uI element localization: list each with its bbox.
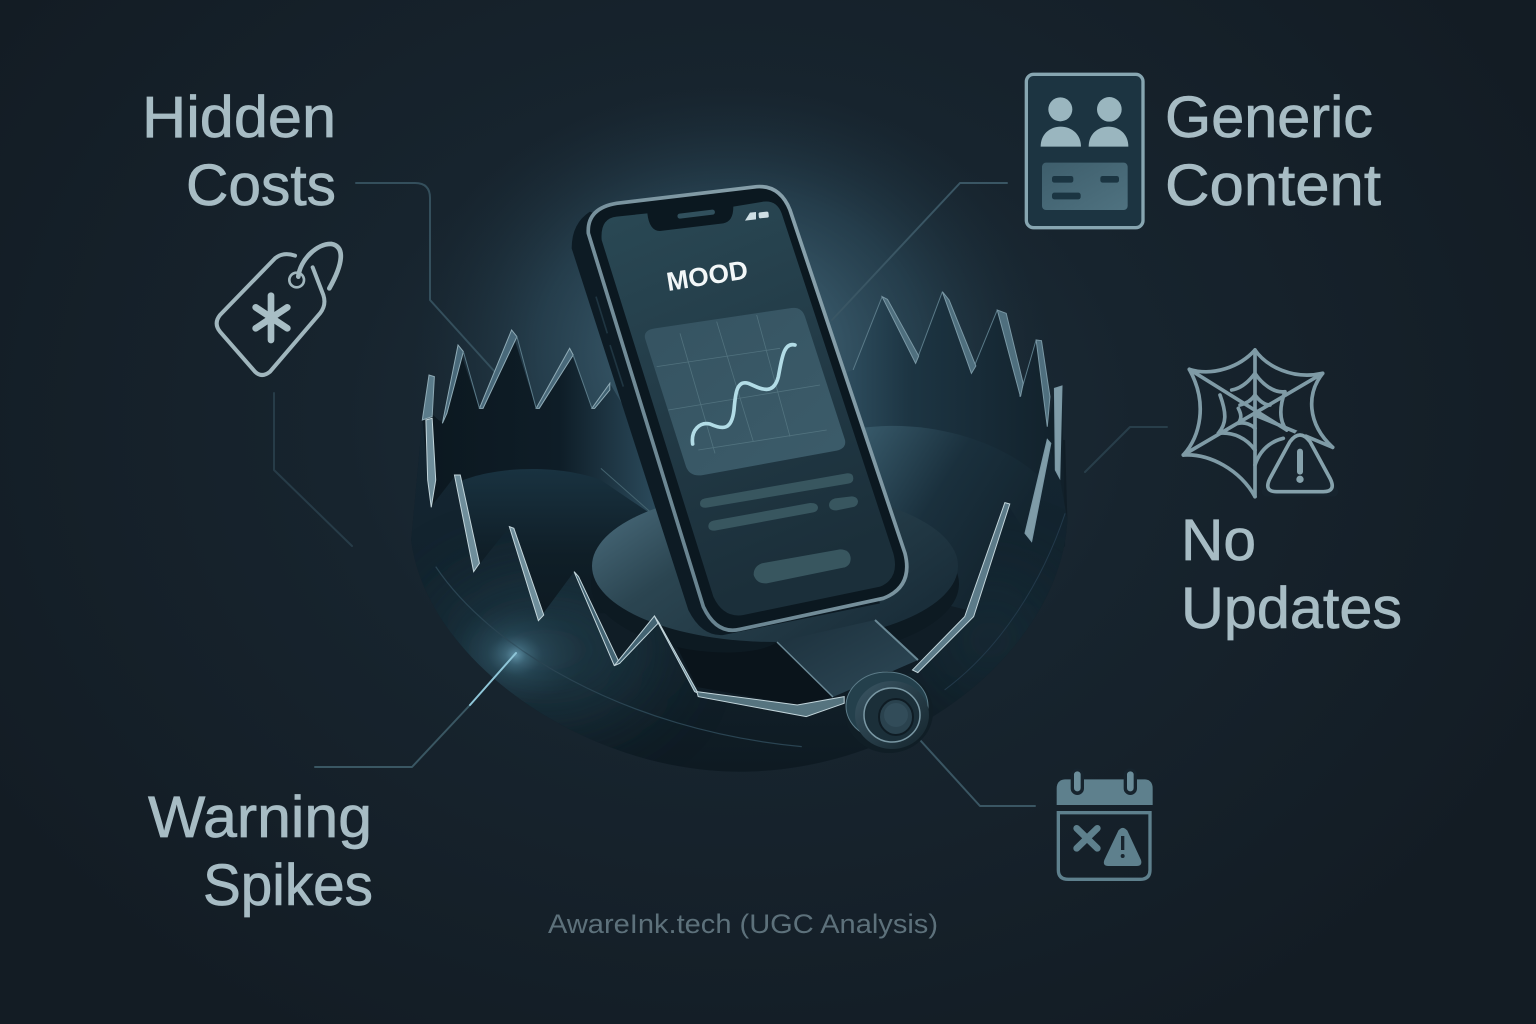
floor platform — [591, 490, 959, 660]
phone — [572, 187, 907, 635]
app title: MOOD — [664, 254, 750, 297]
label: Generic Content: Generic — [1165, 85, 1373, 150]
text bars — [700, 473, 858, 583]
chart grid — [657, 315, 827, 453]
phone speaker — [677, 209, 715, 219]
chart card — [645, 308, 845, 475]
central glow behind phone — [410, 80, 1050, 620]
label: Generic Content: Content — [1165, 153, 1381, 218]
label: No Updates: Updates — [1181, 576, 1402, 641]
phone bezel — [588, 187, 907, 630]
label: Warning Spikes: Warning — [148, 785, 372, 850]
phone side buttons — [596, 297, 623, 387]
bear trap — [411, 292, 1067, 772]
icon: spider web with warning — [1183, 350, 1333, 497]
label: No Updates: No — [1181, 508, 1256, 573]
icon: calendar with warning — [1057, 768, 1153, 879]
label: Hidden Costs — [142, 85, 336, 218]
phone screen — [602, 201, 895, 615]
dark gap under platform — [677, 642, 833, 705]
label: Hidden Costs: Costs — [186, 153, 336, 218]
label: Generic Content — [1165, 85, 1381, 218]
label: Warning Spikes: Spikes — [203, 853, 373, 918]
label: No Updates — [1181, 508, 1402, 641]
warning spark line — [315, 629, 542, 767]
label: Hidden Costs: Hidden — [142, 85, 336, 150]
icon: generic content card — [1026, 74, 1143, 228]
icon: price tag — [217, 244, 341, 375]
mood line — [692, 345, 795, 444]
phone body side — [572, 212, 880, 635]
tooth faces and edge highlights — [422, 292, 1065, 747]
label: Warning Spikes — [148, 785, 373, 918]
trap front wall with teeth — [412, 422, 1067, 730]
footer credit: AwareInk.tech (UGC Analysis) — [548, 909, 938, 939]
trap release knob — [845, 671, 933, 753]
trap arm — [777, 620, 918, 697]
status icons — [745, 211, 769, 221]
trap base dish — [411, 292, 1067, 772]
connector lines — [274, 183, 1167, 806]
